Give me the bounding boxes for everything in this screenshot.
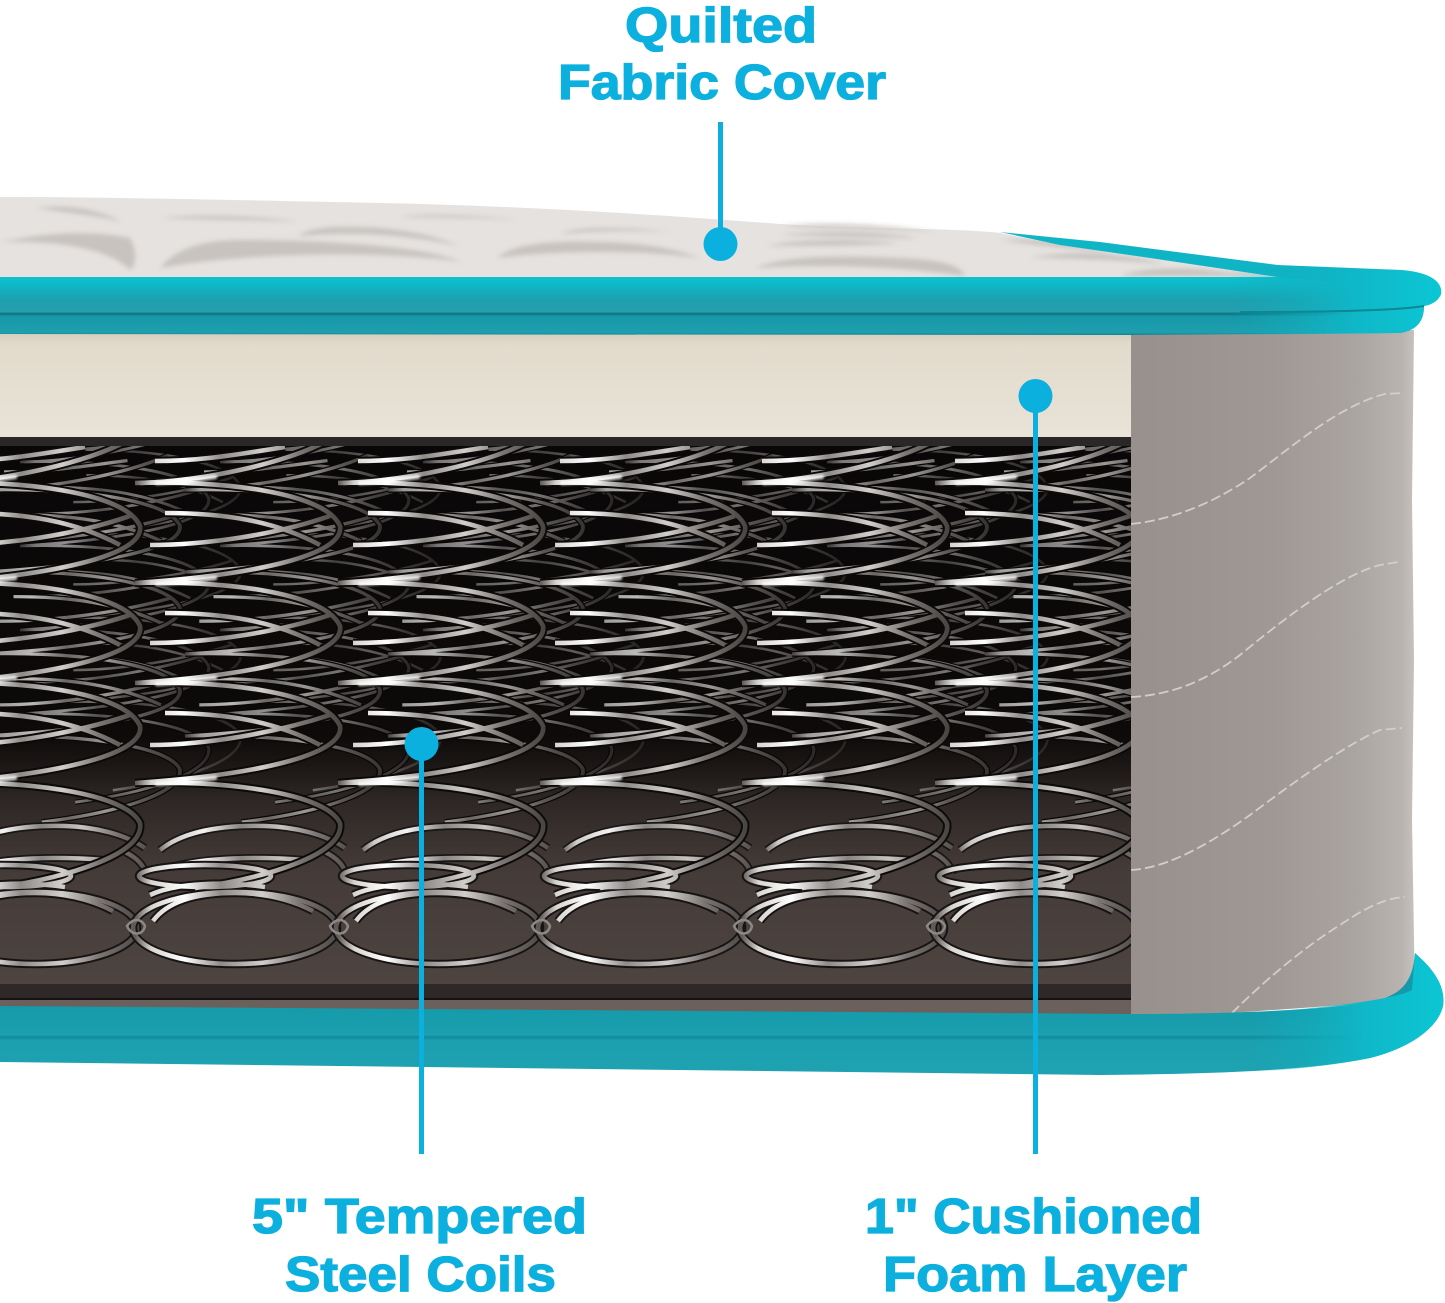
bottom teal border piping [0,953,1443,1075]
heading: 5" Tempered Steel Coils [252,1190,587,1302]
heading: 1" Cushioned Foam Layer: Foam Layer [883,1248,1187,1302]
callout: quilted fabric cover [558,0,886,261]
steel coils block [0,437,1131,1014]
heading: 5" Tempered Steel Coils: Steel Coils [285,1248,556,1302]
top teal border piping [0,232,1441,335]
heading: Quilted Fabric Cover: Quilted [625,0,817,53]
quilted side panel [1131,330,1415,1020]
heading: Quilted Fabric Cover: Fabric Cover [558,56,886,110]
callout: foam layer [865,379,1202,1302]
top felt pad [0,437,1131,446]
coil columns [0,446,1131,968]
callout: steel coils [252,727,587,1302]
heading: 5" Tempered Steel Coils: 5" Tempered [252,1190,587,1244]
pointer line and dot [1018,379,1052,1154]
heading: 1" Cushioned Foam Layer [865,1190,1202,1302]
foam layer [0,334,1132,438]
heading: Quilted Fabric Cover [558,0,886,110]
bottom felt pad [0,984,1131,1015]
heading: 1" Cushioned Foam Layer: 1" Cushioned [865,1190,1202,1244]
panel: mattress cross-section [0,197,1443,1075]
pointer line and dot [704,122,738,261]
pointer line and dot [404,727,438,1154]
side panel stitching [1131,393,1405,1013]
quilted fabric top surface [0,197,1278,280]
